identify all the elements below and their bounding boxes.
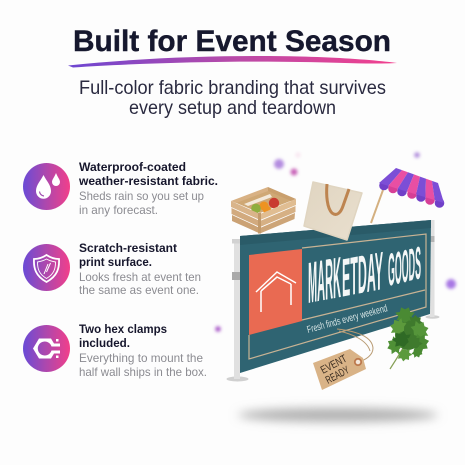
text: hex clamps <box>79 322 207 379</box>
subtitle: every setup and teardown <box>129 97 336 119</box>
title: Built for Event Season <box>73 25 391 58</box>
herb sprig <box>387 307 432 369</box>
floating dots <box>215 152 456 332</box>
text: scratch-resistant: Scratch-resistant <box>79 241 177 255</box>
canopy scallops <box>379 181 444 208</box>
tag string <box>337 329 373 362</box>
canopy stripes <box>379 168 444 203</box>
text: scratch-resistant: the same as event one. <box>79 283 199 297</box>
title brush underline <box>68 56 397 68</box>
banner stand <box>226 220 440 382</box>
text: scratch-resistant: print surface. <box>79 255 152 269</box>
left post <box>226 239 248 382</box>
text: waterproof: Waterproof-coated <box>79 160 186 174</box>
event tag: READY <box>324 364 352 387</box>
text: waterproof <box>78 160 218 217</box>
text: waterproof: in any forecast. <box>79 203 158 217</box>
canopy pole <box>371 190 383 223</box>
text: scratch-resistant <box>79 241 201 297</box>
subtitle: Full-color fabric branding that survives <box>79 77 386 99</box>
right post <box>426 220 440 319</box>
crate slats <box>231 187 296 234</box>
subtitle <box>79 77 386 119</box>
text: hex clamps: included. <box>79 336 130 350</box>
crate interior <box>234 189 293 213</box>
market canopy <box>371 168 444 223</box>
feature: hex clamps <box>23 322 207 379</box>
text: scratch-resistant: Looks fresh at event ten <box>79 270 201 284</box>
logo panel <box>249 249 302 335</box>
banner border <box>249 234 426 359</box>
brand name <box>308 237 421 316</box>
tote handles <box>327 184 349 214</box>
text: hex clamps: half wall ships in the box. <box>79 365 207 379</box>
ground shadow <box>238 408 438 422</box>
text: hex clamps: Everything to mount the <box>79 351 203 365</box>
event tag <box>313 329 373 390</box>
banner fabric <box>240 220 431 373</box>
fruit crate <box>231 187 296 234</box>
event tag: EVENT <box>319 353 349 377</box>
icon: water drops <box>23 163 70 210</box>
icon: shield <box>23 244 70 291</box>
text: hex clamps: Two hex clamps <box>79 322 167 336</box>
feature: scratch-resistant <box>23 241 201 297</box>
tote bag <box>304 182 362 240</box>
fruit <box>251 198 279 214</box>
feature: waterproof <box>23 160 218 217</box>
icon: hex clamp <box>23 325 70 372</box>
icon: house <box>256 272 296 312</box>
tagline: Fresh finds every weekend <box>306 303 389 336</box>
text: waterproof: Sheds rain so you set up <box>79 189 204 203</box>
text: waterproof: weather-resistant fabric. <box>78 174 218 188</box>
